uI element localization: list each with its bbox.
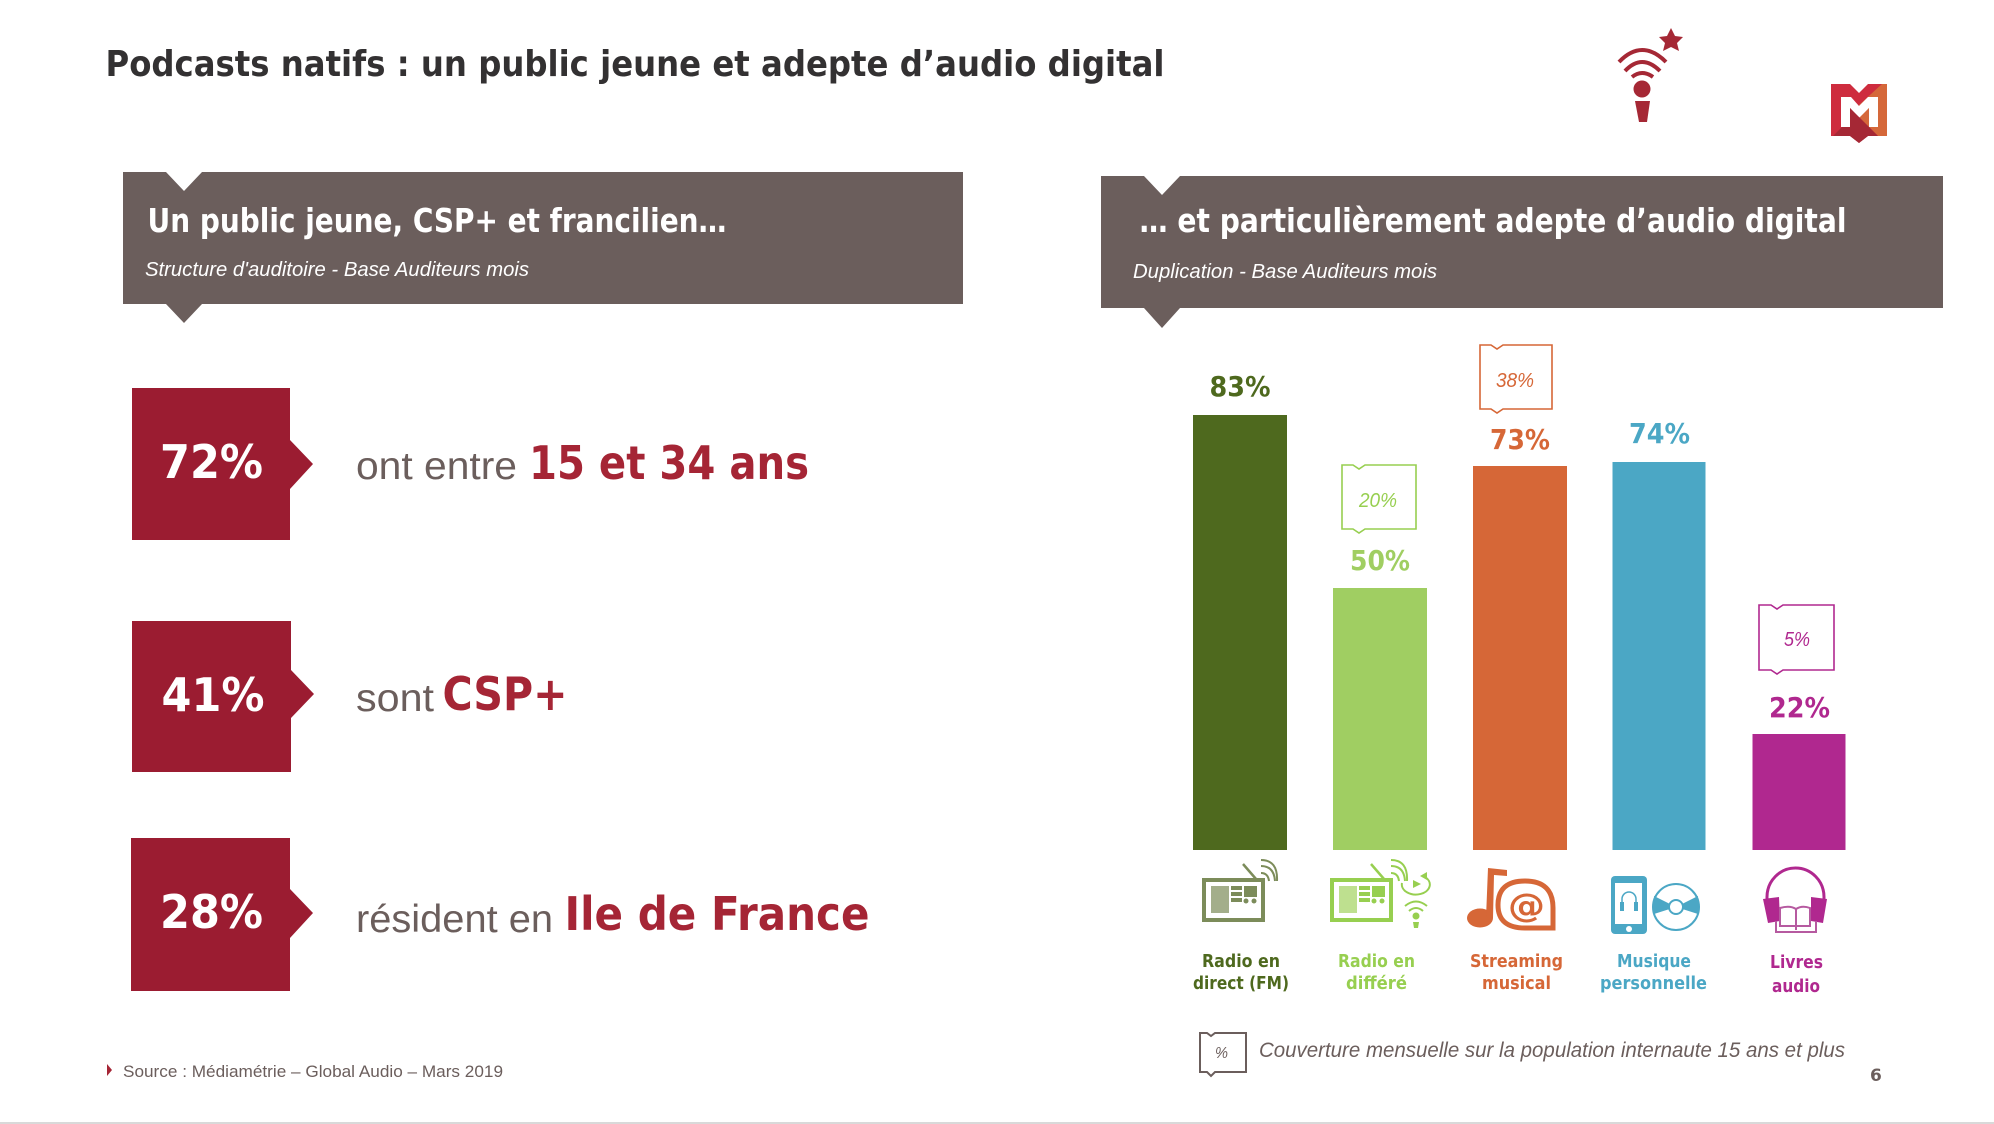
callout: 38% xyxy=(1480,345,1552,413)
stat: 28% xyxy=(131,838,870,991)
label: livres audio xyxy=(1770,952,1823,997)
heading: public: Un public jeune, CSP+ et francilien… xyxy=(148,201,726,240)
icon: streaming note and at sign xyxy=(1467,868,1553,928)
bar: musique personnelle 74% xyxy=(1612,417,1706,850)
bar: radio en différé 50%: 50% xyxy=(1350,544,1410,577)
label: musique personnelle xyxy=(1600,951,1707,994)
label: streaming musical: musical xyxy=(1482,973,1551,994)
bar: livres audio 22% xyxy=(1752,691,1846,850)
stat: 72% xyxy=(132,388,809,540)
heading: audio digital: … et particulièrement adepte d’audio digital xyxy=(1140,201,1846,240)
callout: 20% xyxy=(1342,465,1416,533)
stat: 72%: 15 et 34 ans xyxy=(529,436,809,490)
label: livres audio: audio xyxy=(1772,976,1820,997)
bar: streaming musical 73% xyxy=(1473,423,1567,850)
panel: audio digital xyxy=(1101,176,1943,328)
label: streaming musical xyxy=(1470,951,1563,994)
subheading: audio digital: Duplication - Base Auditeurs mois xyxy=(1133,261,1437,283)
stat: 41%: 41% xyxy=(162,668,264,722)
callout: 5%: 5% xyxy=(1784,629,1810,651)
label: radio en différé: différé xyxy=(1346,973,1407,994)
icon: M logo xyxy=(1831,84,1887,143)
label: livres audio: Livres xyxy=(1770,952,1823,973)
icon: podcast microphone with star xyxy=(1619,28,1683,122)
label: radio en différé xyxy=(1338,951,1415,994)
stat: 41%: sont xyxy=(356,677,434,720)
legend xyxy=(1200,1033,1845,1076)
stat: 28%: 28% xyxy=(160,885,263,939)
stat: 72%: ont entre xyxy=(356,445,517,488)
page number: 6 xyxy=(1870,1066,1882,1086)
stat: 41% xyxy=(132,621,568,772)
icon: radio FM xyxy=(1204,860,1277,920)
label: radio en direct: Radio en xyxy=(1202,951,1280,972)
icon: headphones and book xyxy=(1763,868,1827,932)
bar: radio en direct 83%: 83% xyxy=(1210,370,1270,403)
panel: public jeune xyxy=(123,172,963,323)
stat: 41%: CSP+ xyxy=(442,667,568,721)
icon: radio en différé xyxy=(1332,860,1430,928)
callout: 5% xyxy=(1759,605,1834,674)
stat: 28%: Ile de France xyxy=(564,887,870,941)
label: radio en direct: direct (FM) xyxy=(1193,973,1289,994)
label: radio en différé: Radio en xyxy=(1338,951,1415,972)
stat: 28%: résident en xyxy=(356,898,553,941)
icon: streaming note and at sign: @ xyxy=(1508,886,1545,925)
legend: % xyxy=(1215,1045,1228,1062)
bar: musique personnelle 74%: 74% xyxy=(1629,417,1690,450)
bar: streaming musical 73%: 73% xyxy=(1490,423,1550,456)
bar: radio en différé 50% xyxy=(1333,544,1427,850)
label: musique personnelle: Musique xyxy=(1617,951,1691,972)
legend: Couverture mensuelle sur la population internaute 15 ans et plus xyxy=(1259,1039,1845,1062)
stat: 72%: 72% xyxy=(160,435,263,489)
source note: Source : Médiamétrie – Global Audio – Mars 2019 xyxy=(123,1062,503,1081)
bar chart xyxy=(1193,370,1846,850)
callout: 38%: 38% xyxy=(1496,370,1534,392)
title: Podcasts natifs : un public jeune et adepte d’audio digital xyxy=(106,44,1164,85)
label: streaming musical: Streaming xyxy=(1470,951,1563,972)
bar: livres audio 22%: 22% xyxy=(1769,691,1830,724)
callout: 20%: 20% xyxy=(1358,490,1397,512)
label: musique personnelle: personnelle xyxy=(1600,973,1707,994)
bar: radio en direct 83% xyxy=(1193,370,1287,850)
subheading: public: Structure d'auditoire - Base Auditeurs mois xyxy=(145,259,529,281)
label: radio en direct xyxy=(1193,951,1289,994)
icon: phone and CD xyxy=(1611,876,1699,934)
